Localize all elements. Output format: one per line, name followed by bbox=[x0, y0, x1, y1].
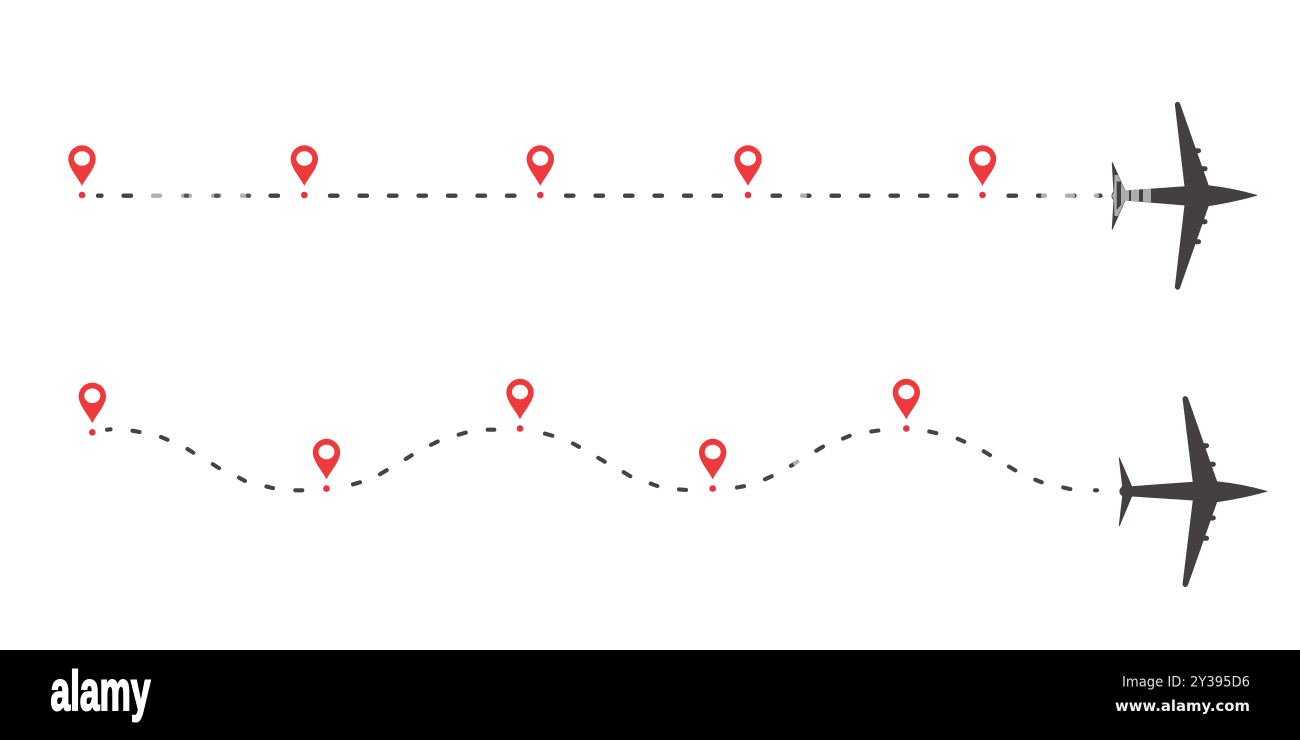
icon: airplane, curved route bbox=[1119, 397, 1267, 587]
straight dashed route line bbox=[98, 194, 1100, 198]
icon: airplane, straight route bbox=[1112, 102, 1257, 289]
pin 3 bbox=[506, 379, 534, 432]
pin 2 bbox=[291, 145, 318, 198]
image id: Image ID: 2Y395D6 bbox=[1122, 675, 1250, 691]
pin 2 bbox=[313, 439, 340, 492]
panel: straight route bbox=[68, 102, 1257, 289]
curved dashed route line bbox=[107, 429, 1097, 490]
pin 1 bbox=[68, 145, 96, 198]
faded dash bbox=[795, 462, 797, 463]
footer bar bbox=[0, 650, 1300, 740]
pin 4 bbox=[699, 439, 726, 492]
pin 3 bbox=[527, 145, 554, 198]
pin 4 bbox=[734, 145, 762, 198]
pin 5 bbox=[969, 145, 996, 198]
logo: alamy: alamy bbox=[50, 659, 150, 722]
pin 5 bbox=[893, 379, 920, 432]
panel: curved route bbox=[79, 379, 1267, 587]
website: www.alamy.com bbox=[1115, 697, 1250, 715]
pin 1 bbox=[79, 383, 106, 436]
